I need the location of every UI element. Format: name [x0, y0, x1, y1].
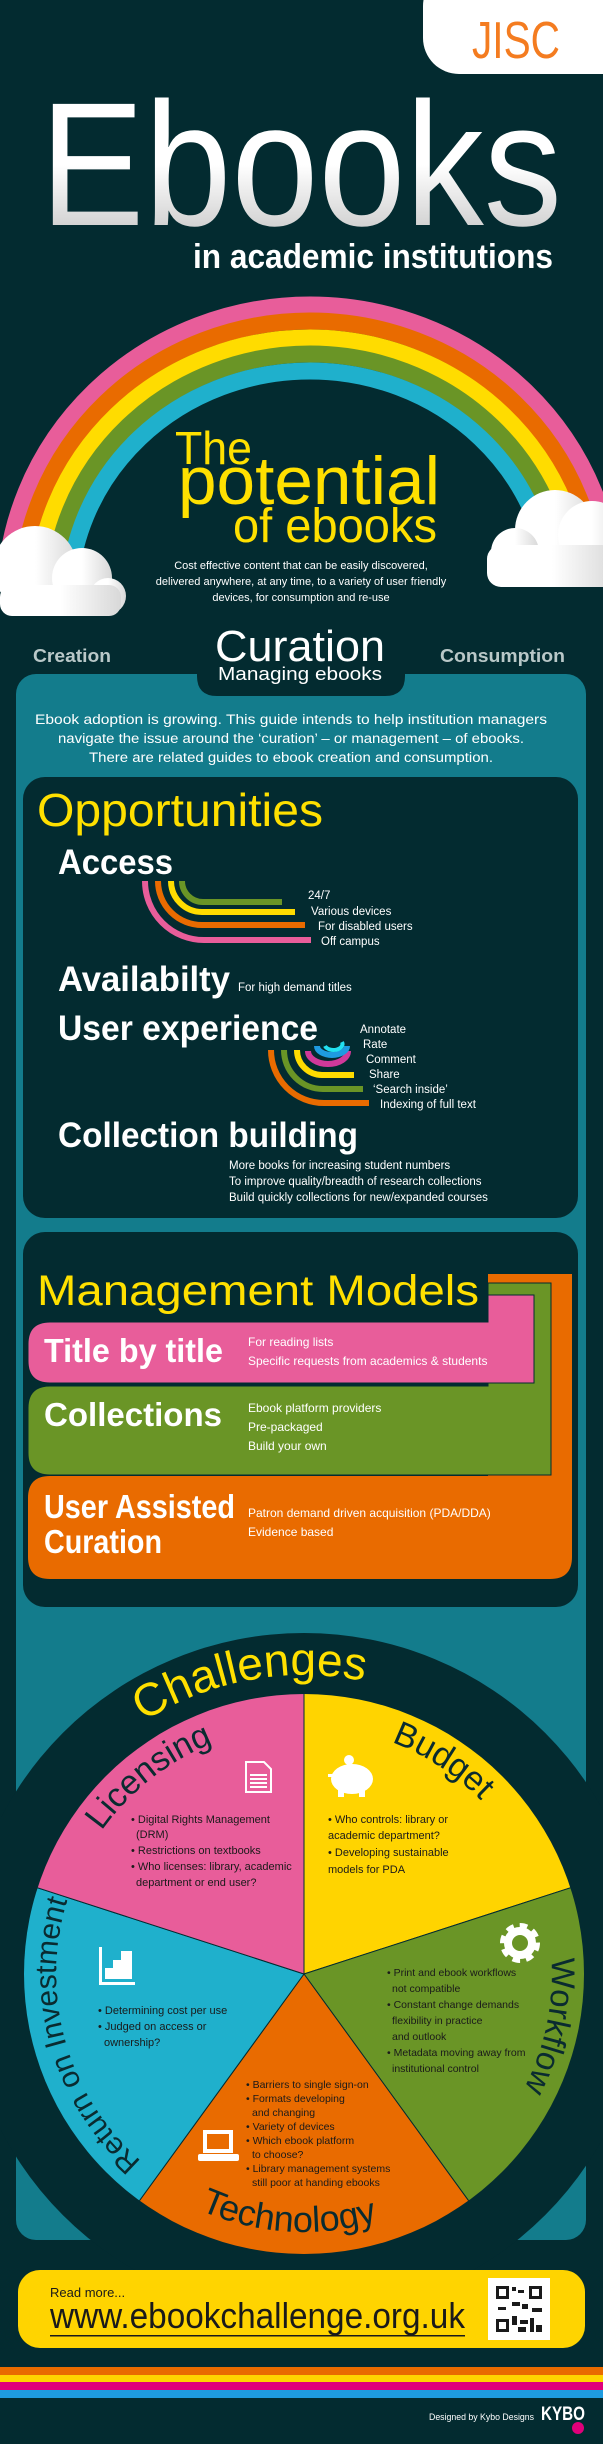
box: collections: Ebook platform providers: [248, 1401, 381, 1415]
heading: Collection building: Collection building: [58, 1116, 358, 1155]
segment: technology: still poor at handing ebooks: [252, 2177, 380, 2189]
segment: licensing: Licensing: [84, 1728, 212, 1829]
text: access items: 24/7: [308, 890, 330, 902]
chart: challenges wheel: [16, 1633, 586, 2254]
panel: opportunities: [23, 777, 578, 1218]
segment: budget: Budget: [394, 1721, 494, 1800]
segment: workflow: • Constant change demands: [387, 1999, 519, 2011]
segment: licensing: department or end user?: [136, 1877, 256, 1889]
box: user assisted curation: Evidence based: [248, 1525, 333, 1539]
segment: workflow: institutional control: [392, 2063, 479, 2075]
text: collection items: More books for increasing student numbers: [229, 1160, 450, 1172]
segment: return on investment: Return on Investment: [36, 1896, 140, 2175]
box: collections: Pre-packaged: [248, 1420, 323, 1434]
text: intro: navigate the issue around the ‘curation’ – or management – of ebooks.: [58, 731, 524, 746]
text: access items: For disabled users: [318, 921, 413, 933]
box: title by title: For reading lists: [248, 1335, 333, 1349]
stripes: [0, 2367, 603, 2398]
text: potential description: [156, 560, 447, 604]
callout: read more: Read more...: [50, 2285, 125, 2300]
text: potential description: devices, for consumption and re-use: [212, 592, 390, 604]
segment: licensing: • Restrictions on textbooks: [131, 1845, 261, 1857]
box: user assisted curation: Curation: [44, 1523, 162, 1560]
segment: technology: Technology: [208, 2188, 373, 2236]
text: intro: There are related guides to ebook creation and consumption.: [89, 750, 493, 765]
segment: licensing: • Who licenses: library, academic: [131, 1861, 292, 1873]
heading: Management Models: Management Models: [37, 1267, 479, 1315]
segment: licensing: • Digital Rights Management: [131, 1814, 270, 1826]
box: title by title: [28, 1295, 534, 1383]
segment: budget: models for PDA: [328, 1864, 406, 1876]
callout: read more: [18, 2270, 585, 2348]
segment: workflow: • Print and ebook workflows: [387, 1967, 516, 1979]
segment: return on investment: • Determining cost per use: [98, 2005, 227, 2017]
icon: piggy bank: [328, 1755, 373, 1797]
text: user experience items: Rate: [363, 1039, 387, 1051]
heading: User experience: User experience: [58, 1009, 318, 1048]
heading: The potential of ebooks: The: [175, 422, 252, 474]
icon: right cloud: [487, 490, 603, 587]
segment: technology: to choose?: [252, 2149, 304, 2161]
segment: budget: [328, 1721, 494, 1876]
text: access items: Various devices: [311, 906, 392, 918]
heading: The potential of ebooks: [175, 422, 440, 553]
text: collection items: Build quickly collections for new/expanded courses: [229, 1192, 488, 1204]
text: collection items: [229, 1160, 488, 1204]
text: access items: Off campus: [321, 936, 380, 948]
icon: QR code: [488, 2278, 550, 2340]
logo: JISC cloud: JISC: [472, 12, 560, 70]
text: user experience items: ‘Search inside’: [373, 1084, 448, 1096]
panel: management models: [23, 1232, 578, 1607]
heading: The potential of ebooks: of ebooks: [233, 500, 437, 553]
text: potential description: Cost effective content that can be easily discovered,: [174, 560, 428, 572]
box: collections: Collections: [44, 1396, 222, 1433]
segment: budget: academic department?: [328, 1830, 440, 1842]
segment: budget: • Who controls: library or: [328, 1814, 448, 1826]
text: availability note: For high demand titles: [238, 982, 352, 994]
text: intro: Ebook adoption is growing. This guide intends to help institution managers: [35, 712, 547, 727]
label: Consumption: Consumption: [440, 646, 565, 666]
text: intro: [35, 712, 547, 765]
segment: return on investment: ownership?: [104, 2037, 160, 2049]
box: user assisted curation: [28, 1274, 572, 1579]
tab: Curation: [197, 620, 405, 696]
tab: Curation: Managing ebooks: [218, 664, 382, 684]
rainbow: [2, 296, 603, 550]
segment: licensing: (DRM): [136, 1829, 168, 1841]
segment: technology: • Barriers to single sign-on: [246, 2079, 369, 2091]
box: user assisted curation: Patron demand driven acquisition (PDA/DDA): [248, 1506, 491, 1520]
heading: The potential of ebooks: potential: [178, 443, 440, 519]
text: user experience items: [360, 1024, 477, 1111]
label: Creation: Creation: [33, 646, 111, 666]
heading: Availabilty: Availabilty: [58, 960, 231, 999]
box: user assisted curation: User Assisted: [44, 1488, 235, 1525]
text: user experience items: Indexing of full text: [380, 1099, 477, 1111]
panel: teal main: [16, 674, 586, 2240]
icon: bar chart: [99, 1947, 135, 1985]
text: user experience items: Share: [369, 1069, 400, 1081]
text: access items: [308, 890, 413, 948]
segment: workflow: • Metadata moving away from: [387, 2047, 526, 2059]
segment: licensing: [84, 1728, 292, 1889]
icon: left cloud: [0, 526, 126, 616]
credit: Kybo Designs: Designed by Kybo Designs: [429, 2412, 534, 2422]
callout: read more: www.ebookchallenge.org.uk: [49, 2295, 466, 2336]
chart: user experience arcs: [271, 1042, 369, 1103]
box: collections: Build your own: [248, 1439, 327, 1453]
title: Ebooks: in academic institutions: [193, 238, 553, 276]
box: title by title: Specific requests from academics & students: [248, 1354, 487, 1368]
box: title by title: Title by title: [44, 1332, 223, 1369]
box: collections: [28, 1283, 551, 1475]
heading: Access: Access: [58, 843, 173, 882]
chart: access arcs: [145, 881, 311, 940]
segment: technology: [198, 2079, 390, 2236]
heading: Opportunities: Opportunities: [37, 784, 323, 836]
segment: return on investment: • Judged on access or: [98, 2021, 207, 2033]
segment: technology: • Which ebook platform: [246, 2135, 354, 2147]
segment: return on investment: [36, 1896, 227, 2175]
segment: technology: • Library management systems: [246, 2163, 390, 2175]
text: collection items: To improve quality/breadth of research collections: [229, 1176, 482, 1188]
segment: workflow: and outlook: [392, 2031, 447, 2043]
segment: workflow: flexibility in practice: [392, 2015, 483, 2027]
text: potential description: delivered anywhere, at any time, to a variety of user friendly: [156, 576, 447, 588]
segment: technology: • Variety of devices: [246, 2121, 335, 2133]
segment: technology: and changing: [252, 2107, 315, 2119]
segment: workflow: not compatible: [392, 1983, 460, 1995]
segment: technology: • Formats developing: [246, 2093, 345, 2105]
tab: Curation: Curation: [215, 622, 385, 671]
segment: workflow: Workflow: [526, 1958, 575, 2096]
icon: document: [246, 1762, 271, 1792]
text: user experience items: Annotate: [360, 1024, 406, 1036]
segment: budget: • Developing sustainable: [328, 1847, 449, 1859]
icon: laptop: [198, 2130, 239, 2161]
icon: gear: [504, 1927, 536, 1959]
credit: Kybo Designs: [429, 2404, 585, 2434]
text: user experience items: Comment: [366, 1054, 417, 1066]
credit: Kybo Designs: KYBO: [541, 2404, 585, 2425]
heading: Challenges: Challenges: [134, 1650, 366, 1716]
logo: JISC cloud: [423, 0, 603, 74]
segment: workflow: [387, 1923, 575, 2096]
